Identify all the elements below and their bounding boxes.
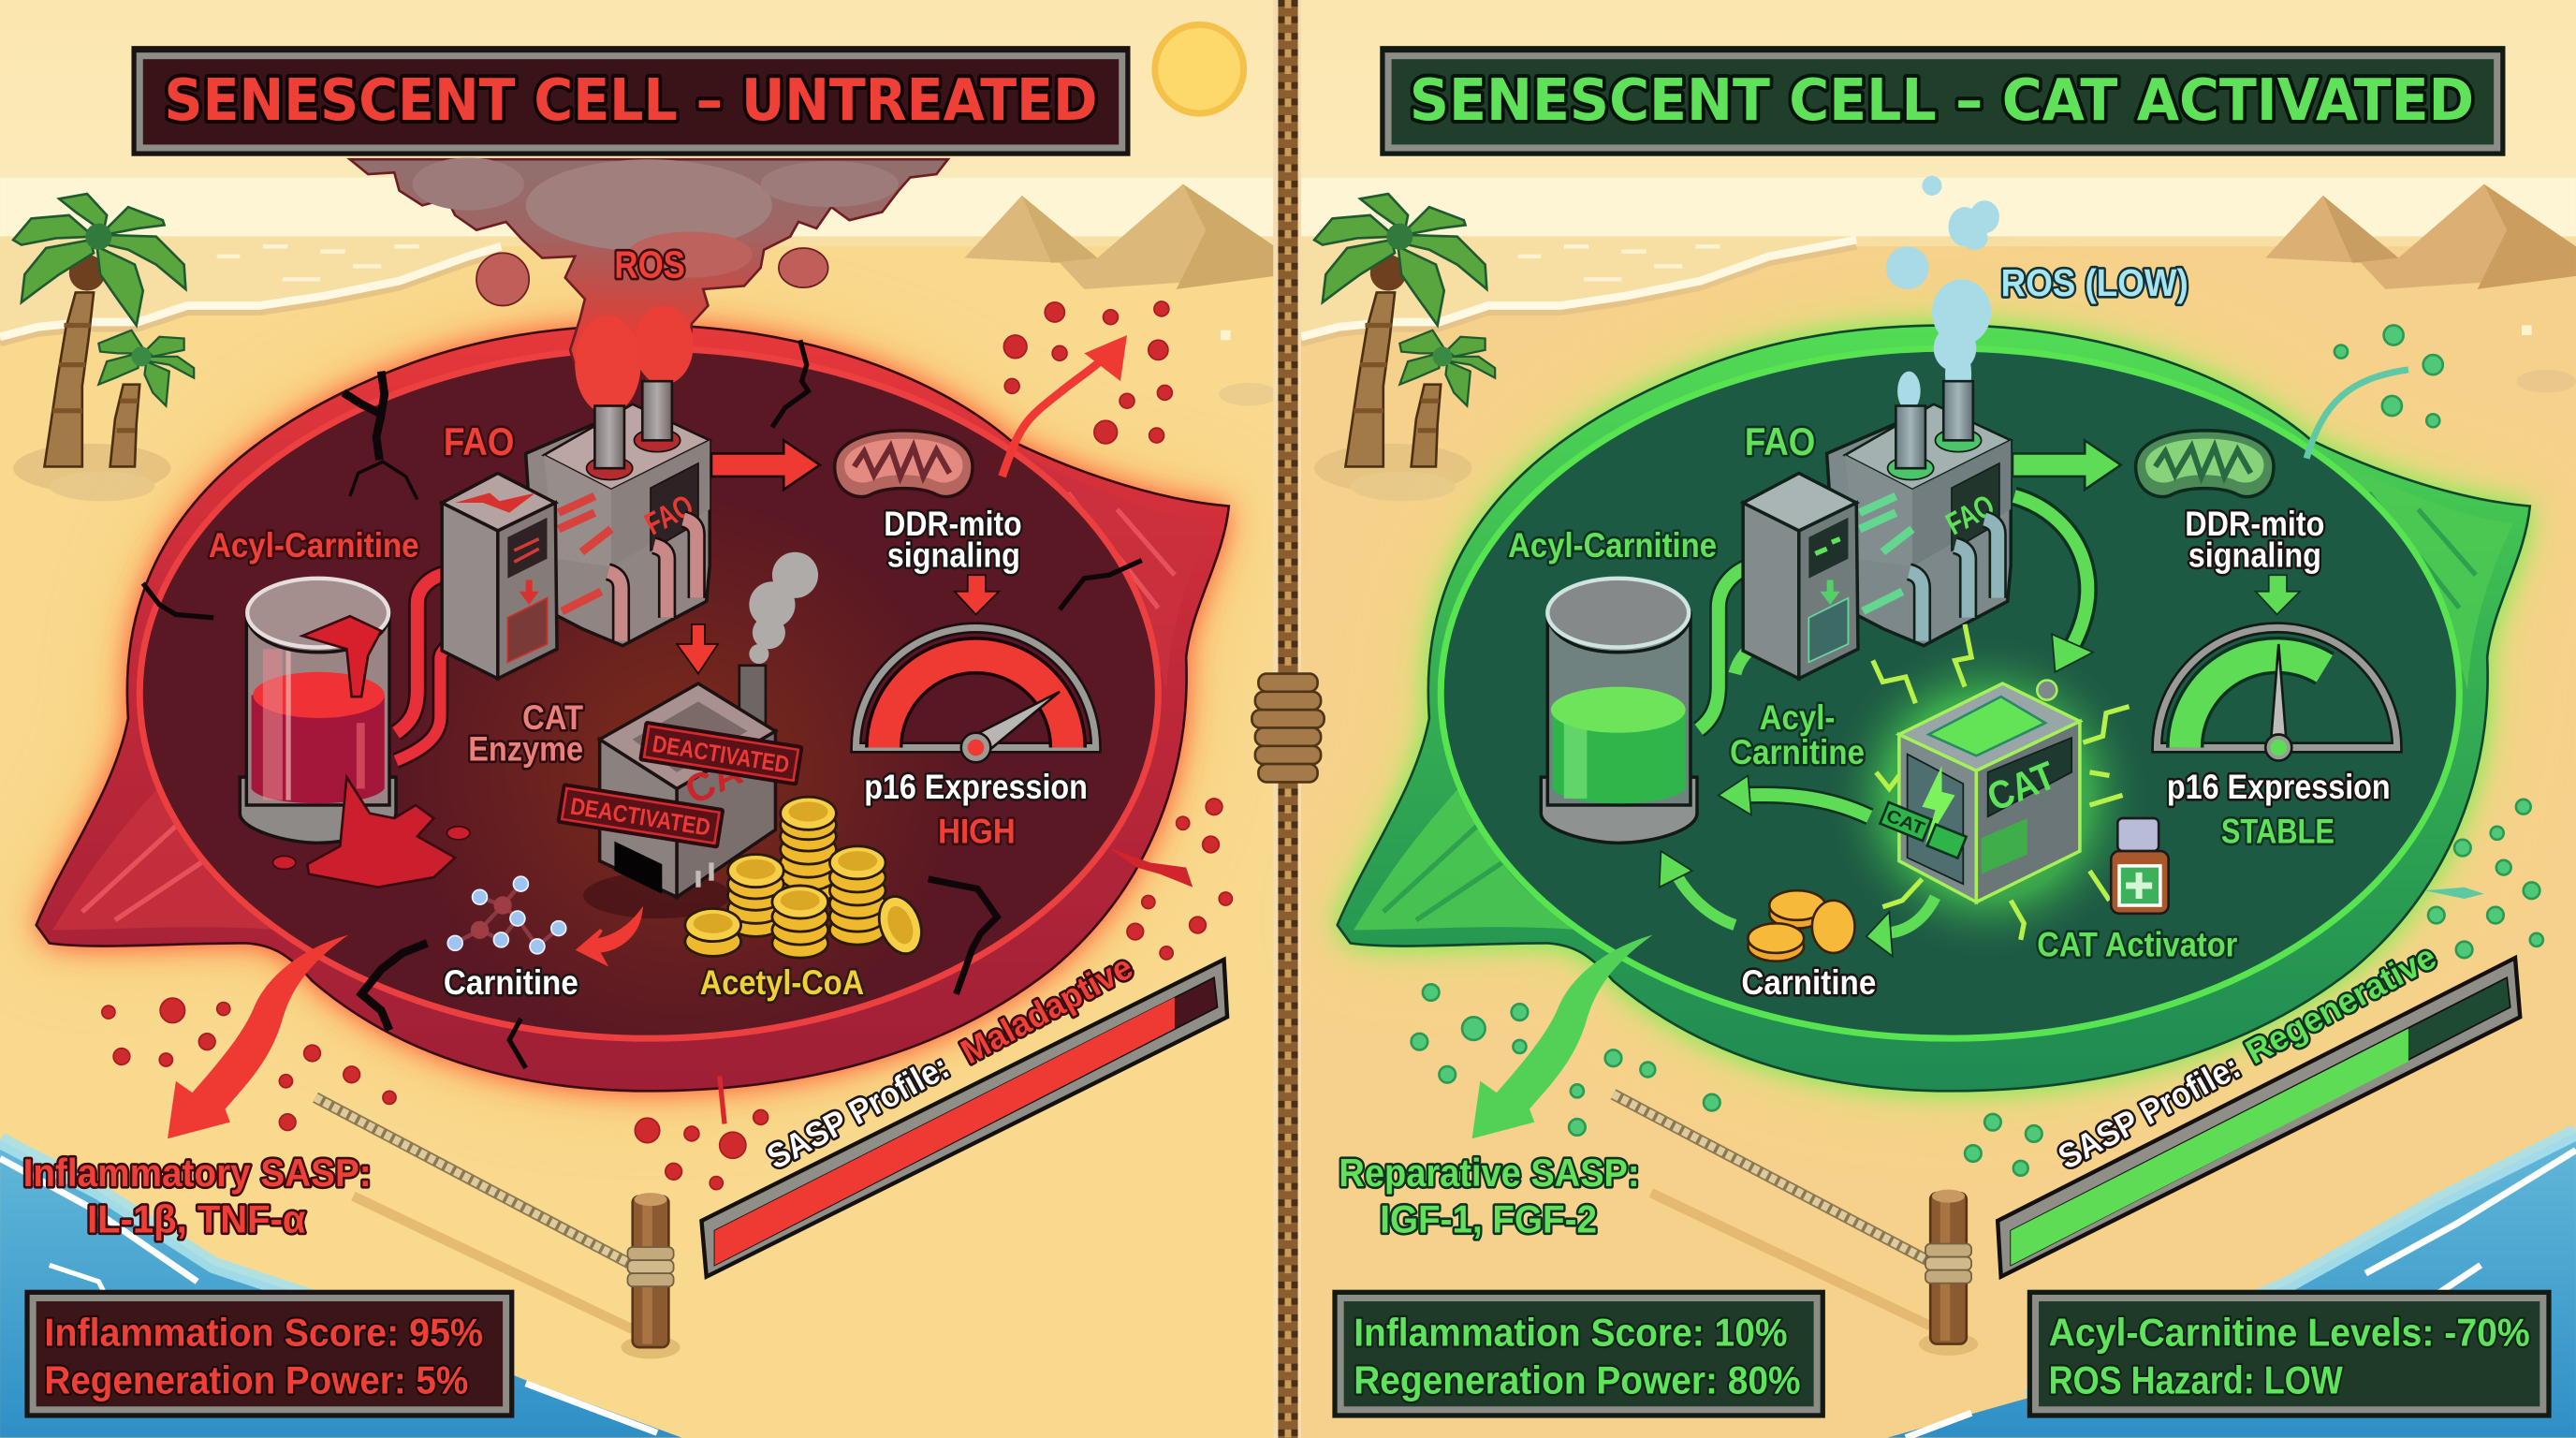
label: Acyl-Carnitine: Acyl-Carnitine xyxy=(209,526,419,565)
stamp: deactivated upper xyxy=(638,721,804,786)
panel: middle scores: Inflammation Score: 10% xyxy=(1354,1310,1788,1354)
panel: right scores: ROS Hazard: LOW xyxy=(2049,1357,2343,1401)
icon: mitochondrion right xyxy=(2136,431,2274,497)
icon: acetyl-CoA coins xyxy=(685,797,929,960)
panel: middle scores: Regeneration Power: 80% xyxy=(1354,1357,1801,1401)
label: p16 Expression high: HIGH xyxy=(938,812,1016,850)
chimneys xyxy=(1888,457,1934,479)
rope post left xyxy=(315,1097,681,1358)
background: untreated beach xyxy=(0,0,1278,1438)
label: SASP Profile regenerative: Regenerative xyxy=(2239,937,2442,1071)
label: SASP Profile regenerative xyxy=(2052,937,2442,1177)
icon: FAO machine right xyxy=(1743,381,2011,679)
panel: right scores: Acyl-Carnitine Levels: -70% xyxy=(2049,1310,2530,1354)
stamp: deactivated upper: DEACTIVATED xyxy=(651,731,791,779)
panel: untreated cell xyxy=(37,325,1229,1091)
panel: right scores xyxy=(2027,1290,2552,1418)
puddle xyxy=(307,777,455,888)
pipes xyxy=(607,520,696,640)
smoke: ROS cloud xyxy=(350,157,948,447)
arrow: carnitine to jar xyxy=(1660,851,1734,925)
label: SASP Profile maladaptive: Maladaptive xyxy=(955,947,1139,1071)
divider rope xyxy=(1273,0,1301,1438)
icon: CAT device: CAT xyxy=(1883,806,1927,840)
label: p16 Expression high xyxy=(864,768,1088,850)
rope knot xyxy=(1251,674,1325,782)
label: Reparative SASP: Reparative SASP: xyxy=(1339,1151,1640,1195)
red spots xyxy=(102,301,1232,1190)
icon: deactivated CAT furnace: CAT xyxy=(679,740,768,813)
arrow: FAO to CAT curve xyxy=(2014,496,2093,672)
green spots xyxy=(1412,325,2543,1176)
panel: treated cell xyxy=(1338,325,2530,1091)
jar: acyl-carnitine overflow xyxy=(240,579,470,888)
label: DDR-mito signaling right: DDR-mito xyxy=(2185,505,2324,543)
label: DDR-mito signaling: DDR-mito xyxy=(884,505,1022,543)
stamp: deactivated lower xyxy=(556,783,724,849)
label: p16 Expression stable xyxy=(2167,768,2391,850)
label: Acyl-Carnitine middle: Acyl- xyxy=(1760,698,1835,737)
arrow: CAT to carnitine xyxy=(1866,897,1935,956)
palms right xyxy=(1314,194,1495,501)
label: p16 Expression stable: STABLE xyxy=(2221,812,2334,850)
title: untreated xyxy=(131,46,1131,156)
small red drip xyxy=(720,1077,724,1123)
arrow: teal up-right xyxy=(2306,370,2408,459)
arrow: furnace to carnitine xyxy=(578,912,641,962)
bar: SASP profile regenerative xyxy=(1998,958,2520,1277)
label: p16 Expression high: p16 Expression xyxy=(864,768,1088,806)
label: SASP Profile regenerative: SASP Profile: xyxy=(2052,1047,2247,1177)
cell membrane xyxy=(1338,325,2530,1091)
label: p16 Expression stable: p16 Expression xyxy=(2167,768,2391,806)
cell interior xyxy=(139,348,1158,1038)
arrow: inflammatory SASP out xyxy=(168,935,348,1138)
chart: p16 gauge high xyxy=(856,628,1096,762)
arrow: jar to cabinet lower xyxy=(396,640,459,761)
label: FAO right: FAO xyxy=(1745,419,1815,463)
title: cat activated: SENESCENT CELL – CAT ACTIVATED xyxy=(1410,67,2474,134)
label: Carnitine right: Carnitine xyxy=(1741,963,1876,1002)
arrow: reparative SASP out xyxy=(1472,935,1653,1138)
panel: left scores: Regeneration Power: 5% xyxy=(44,1357,468,1401)
smoke stream lower xyxy=(595,407,621,447)
label: Inflammatory SASP: Inflammatory SASP: xyxy=(23,1151,372,1195)
label: CAT Enzyme xyxy=(468,698,584,769)
arrow: DDR to gauge right xyxy=(2256,575,2300,614)
label: Acyl-Carnitine middle: Carnitine xyxy=(1730,733,1865,771)
panel: middle scores xyxy=(1332,1290,1825,1418)
label: Reparative SASP: IGF-1, FGF-2 xyxy=(1380,1196,1597,1240)
title: untreated: SENESCENT CELL – UNTREATED xyxy=(165,67,1097,134)
icon: deactivated CAT furnace xyxy=(583,666,775,918)
cabinet xyxy=(1743,503,1799,679)
icon: sun xyxy=(1151,22,1247,117)
cell membrane xyxy=(37,325,1229,1091)
arrow: FAO to mitochondria xyxy=(711,440,820,490)
icon: FAO machine xyxy=(442,381,710,679)
cabinet xyxy=(442,503,498,679)
panel: left scores xyxy=(24,1290,514,1418)
icon: FAO machine: FAO xyxy=(639,489,699,542)
red droplet xyxy=(1109,848,1193,888)
label: Reparative SASP xyxy=(1339,1151,1640,1240)
label: Acyl-Carnitine right: Acyl-Carnitine xyxy=(1508,526,1717,565)
label: CAT Activator: CAT Activator xyxy=(2037,925,2237,963)
label: DDR-mito signaling: signaling xyxy=(887,536,1020,574)
label: DDR-mito signaling xyxy=(884,505,1022,574)
cell interior xyxy=(1441,348,2459,1038)
pipes xyxy=(1909,520,1998,640)
label: Carnitine: Carnitine xyxy=(444,963,578,1002)
icon: CAT device xyxy=(1873,624,2130,940)
label: SASP Profile maladaptive: SASP Profile: xyxy=(761,1047,955,1177)
icon: furnace smoke xyxy=(749,552,818,664)
chimneys xyxy=(587,457,633,479)
arrow: FAO to mitochondria right xyxy=(2012,440,2121,490)
label: ROS: ROS xyxy=(614,243,685,286)
label: CAT Enzyme: Enzyme xyxy=(468,730,583,769)
smoke puff left xyxy=(476,253,529,305)
arrow: jar to cabinet right xyxy=(1699,539,1778,729)
label: CAT Enzyme: CAT xyxy=(522,698,584,737)
icon: carnitine coins xyxy=(1748,890,1854,961)
water: bottom-right xyxy=(1888,1132,2576,1438)
icon: FAO machine right: FAO xyxy=(1940,489,2000,542)
icon: CAT device: CAT xyxy=(1981,753,2062,819)
teal splash xyxy=(2424,888,2484,899)
bar: SASP profile maladaptive xyxy=(701,960,1227,1277)
panel: left scores: Inflammation Score: 95% xyxy=(44,1310,483,1354)
arrow: CAT to jar xyxy=(1719,775,1869,816)
title: cat activated xyxy=(1380,46,2505,156)
smoke puff right xyxy=(779,248,828,287)
rope post right xyxy=(1613,1094,1978,1356)
arrow: FAO to CAT down xyxy=(677,624,718,674)
palms left xyxy=(13,194,194,501)
label: Acetyl-CoA: Acetyl-CoA xyxy=(700,963,864,1002)
arrow: DDR to gauge xyxy=(955,575,999,614)
smoke: ROS low xyxy=(1886,176,1999,411)
label: ROS LOW: ROS (LOW) xyxy=(2001,261,2188,304)
label: Inflammatory SASP: IL-1β, TNF-α xyxy=(87,1196,306,1240)
arrow: jar to cabinet upper xyxy=(396,559,480,733)
water: bottom-left xyxy=(0,1140,681,1438)
icon: mitochondrion xyxy=(835,431,973,497)
icon: CAT activator bottle xyxy=(2111,818,2169,914)
label: Acyl-Carnitine middle xyxy=(1730,698,1865,771)
icon: carnitine molecule xyxy=(447,876,566,954)
background: treated beach xyxy=(1301,0,2576,1438)
arrow: escaping up-right xyxy=(1003,335,1127,477)
label: FAO: FAO xyxy=(444,419,514,463)
label: Inflammatory SASP xyxy=(23,1151,372,1240)
jar: acyl-carnitine low xyxy=(1541,579,1697,843)
membrane cracks xyxy=(143,340,1142,1068)
label: DDR-mito signaling right xyxy=(2185,505,2324,574)
label: DDR-mito signaling right: signaling xyxy=(2188,536,2321,574)
chart: p16 gauge stable xyxy=(2157,627,2397,761)
stamp: deactivated lower: DEACTIVATED xyxy=(568,793,712,842)
label: SASP Profile maladaptive xyxy=(761,947,1139,1177)
